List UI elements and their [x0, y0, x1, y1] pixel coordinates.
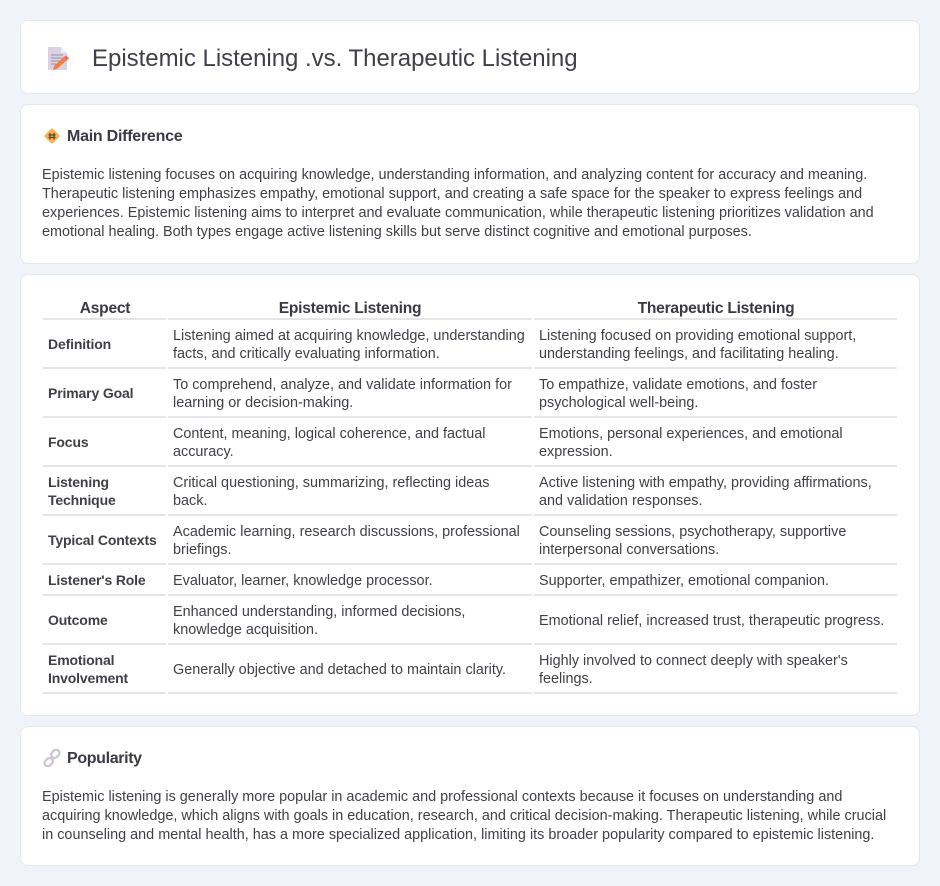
comparison table: Evaluator, learner, knowledge processor. — [173, 573, 433, 589]
comparison table: Counseling sessions, psychotherapy, supportive — [539, 524, 846, 540]
comparison table: Academic learning, research discussions, professional — [173, 524, 520, 540]
comparison table — [43, 300, 897, 694]
table header: epistemic listening: Epistemic Listening — [279, 300, 421, 317]
icon: document with pencil — [48, 47, 69, 70]
main difference text: Epistemic listening focuses on acquiring knowledge, understanding information, and analyzing content for accuracy and meaning. — [42, 166, 867, 182]
comparison table: feelings. — [539, 671, 593, 687]
comparison table: briefings. — [173, 542, 232, 558]
comparison table: and validation responses. — [539, 493, 702, 509]
row: listening technique: Technique — [48, 492, 116, 508]
comparison table: psychological well-being. — [539, 395, 698, 411]
row: listening technique: Listening — [48, 474, 109, 490]
row: typical contexts: Typical Contexts — [48, 532, 157, 548]
comparison table: Emotions, personal experiences, and emotional — [539, 426, 843, 442]
row: emotional involvement: Involvement — [48, 670, 128, 686]
comparison table: knowledge acquisition. — [173, 622, 318, 638]
row: definition: Definition — [48, 336, 111, 352]
row: outcome: Outcome — [48, 612, 108, 628]
icon: orange diamond sign — [44, 128, 60, 144]
comparison table: Listening aimed at acquiring knowledge, understanding — [173, 328, 525, 344]
comparison table: Highly involved to connect deeply with speaker's — [539, 653, 848, 669]
row: focus: Focus — [48, 434, 88, 450]
panel: main difference — [20, 104, 920, 264]
comparison table: Supporter, empathizer, emotional companion. — [539, 573, 829, 589]
row: listener's role: Listener's Role — [48, 572, 146, 588]
comparison table: learning or decision-making. — [173, 395, 353, 411]
table header: aspect: Aspect — [80, 300, 130, 317]
main difference text — [42, 166, 874, 240]
popularity text: in counseling and mental health, has a more specialized application, limiting its broader popularity compared to epistemic listening. — [42, 827, 874, 843]
comparison table: back. — [173, 493, 207, 509]
popularity text — [42, 788, 886, 843]
row: listening technique — [48, 474, 116, 508]
row: emotional involvement — [48, 652, 128, 686]
title: Epistemic Listening .vs. Therapeutic Listening — [92, 45, 578, 72]
row: primary goal: Primary Goal — [48, 385, 133, 401]
comparison table: Emotional relief, increased trust, therapeutic progress. — [539, 613, 884, 629]
comparison table: Generally objective and detached to maintain clarity. — [173, 662, 506, 678]
comparison table: Critical questioning, summarizing, reflecting ideas — [173, 475, 489, 491]
comparison table: interpersonal conversations. — [539, 542, 719, 558]
comparison table: understanding feelings, and facilitating healing. — [539, 346, 839, 362]
icon: chain link — [43, 749, 61, 767]
comparison table: To comprehend, analyze, and validate information for — [173, 377, 512, 393]
comparison table: Listening focused on providing emotional support, — [539, 328, 856, 344]
comparison table: expression. — [539, 444, 613, 460]
main difference text: Therapeutic listening emphasizes empathy, emotional support, and creating a safe space for the speaker to express feelings and — [42, 186, 862, 202]
comparison table: facts, and critically evaluating information. — [173, 346, 440, 362]
main difference text: emotional healing. Both types engage active listening skills but serve distinct cognitive and emotional purposes. — [42, 224, 752, 240]
comparison table: To empathize, validate emotions, and foster — [539, 377, 817, 393]
comparison table: accuracy. — [173, 444, 234, 460]
heading: popularity: Popularity — [67, 750, 142, 767]
comparison table: Enhanced understanding, informed decisions, — [173, 604, 465, 620]
panel: popularity — [20, 726, 920, 866]
table header: therapeutic listening: Therapeutic Listening — [638, 300, 794, 317]
popularity text: acquiring knowledge, which aligns with goals in education, research, and critical decision-making. Therapeutic listening, while crucial — [42, 808, 886, 824]
header panel — [20, 20, 920, 94]
row: emotional involvement: Emotional — [48, 652, 114, 668]
comparison table: Content, meaning, logical coherence, and factual — [173, 426, 485, 442]
popularity text: Epistemic listening is generally more popular in academic and professional contexts because it focuses on understanding and — [42, 788, 842, 804]
panel: comparison table — [20, 274, 920, 716]
main difference text: experiences. Epistemic listening aims to interpret and evaluate communication, while therapeutic listening prioritizes validation and — [42, 205, 874, 221]
heading: main difference: Main Difference — [67, 128, 182, 145]
comparison table: Active listening with empathy, providing affirmations, — [539, 475, 872, 491]
